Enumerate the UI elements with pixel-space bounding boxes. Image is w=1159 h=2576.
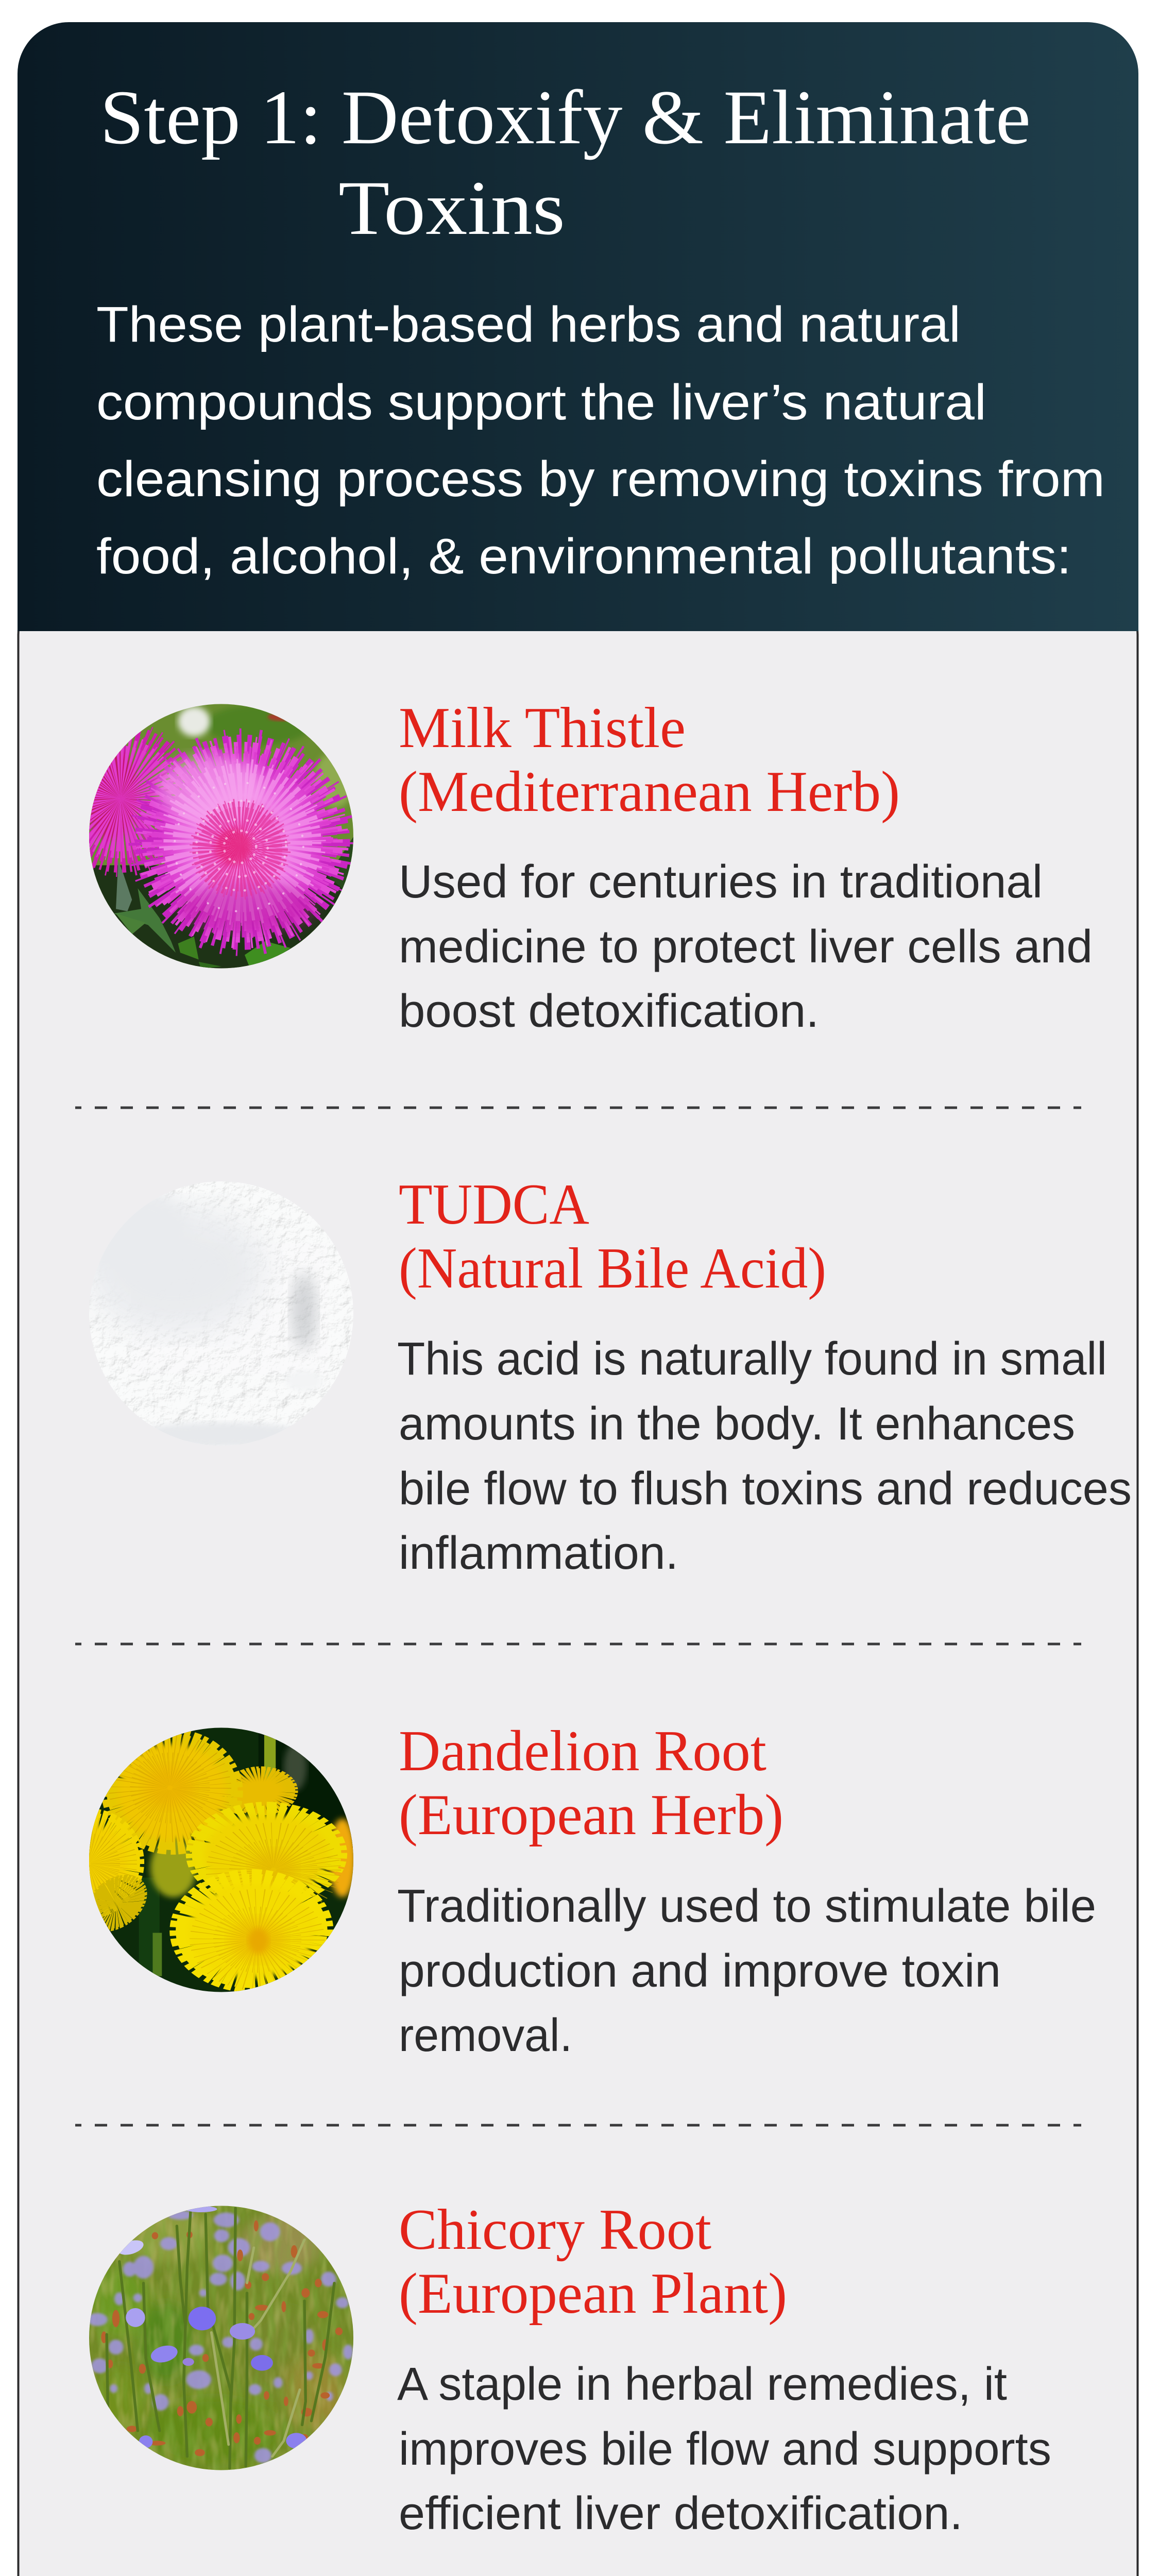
description: chicory root: A staple in herbal remedies, it — [397, 2359, 1007, 2410]
card panel — [19, 587, 1137, 2576]
heading: tudca — [399, 1173, 826, 1300]
description: milk thistle: medicine to protect liver cells and — [399, 921, 1093, 973]
heading: tudca: (Natural Bile Acid) — [399, 1236, 826, 1300]
description: tudca: amounts in the body. It enhances — [399, 1398, 1075, 1450]
heading: tudca: TUDCA — [399, 1173, 589, 1236]
heading: milk thistle — [399, 696, 900, 824]
photo: milk thistle flower — [81, 700, 357, 973]
description: dandelion root — [397, 1880, 1096, 2061]
description: tudca — [397, 1333, 1132, 1579]
heading: chicory root: (European Plant) — [399, 2262, 787, 2326]
description: chicory root: improves bile flow and supports — [399, 2424, 1051, 2475]
title — [100, 75, 1031, 251]
description: tudca: bile flow to flush toxins and reduces — [399, 1463, 1132, 1515]
intro text — [96, 296, 1105, 584]
title: Step 1: Detoxify & Eliminate — [100, 75, 1031, 160]
heading: chicory root — [399, 2198, 787, 2326]
heading: milk thistle: (Mediterranean Herb) — [399, 760, 900, 824]
description: dandelion root: production and improve toxin — [399, 1945, 1001, 1997]
heading: dandelion root: (European Herb) — [399, 1783, 783, 1847]
item: milk thistle — [81, 696, 1093, 1037]
item: tudca — [85, 1173, 1132, 1579]
intro text: cleansing process by removing toxins from — [96, 451, 1105, 507]
heading: chicory root: Chicory Root — [399, 2198, 711, 2262]
description: dandelion root: removal. — [399, 2010, 572, 2061]
photo: chicory meadow — [86, 2202, 357, 2475]
description: dandelion root: Traditionally used to stimulate bile — [397, 1880, 1096, 1932]
description: milk thistle — [399, 856, 1093, 1037]
description: chicory root: efficient liver detoxification. — [399, 2488, 963, 2539]
description: chicory root — [397, 2359, 1051, 2539]
intro text: compounds support the liver’s natural — [96, 374, 986, 430]
title: Toxins — [338, 165, 565, 251]
photo: dandelion flowers — [89, 1728, 353, 1992]
description: milk thistle: Used for centuries in traditional — [399, 856, 1043, 908]
heading: dandelion root — [399, 1719, 783, 1847]
description: tudca: inflammation. — [399, 1528, 678, 1579]
item: chicory root — [86, 2198, 1051, 2539]
photo: white powder — [85, 1180, 355, 1448]
heading: milk thistle: Milk Thistle — [399, 696, 686, 760]
header banner — [18, 22, 1138, 631]
item: dandelion root — [49, 1719, 1096, 2061]
description: tudca: This acid is naturally found in small — [397, 1333, 1107, 1385]
heading: dandelion root: Dandelion Root — [399, 1719, 766, 1783]
description: milk thistle: boost detoxification. — [399, 986, 819, 1037]
intro text: food, alcohol, & environmental pollutants: — [96, 528, 1071, 584]
intro text: These plant-based herbs and natural — [96, 296, 961, 352]
